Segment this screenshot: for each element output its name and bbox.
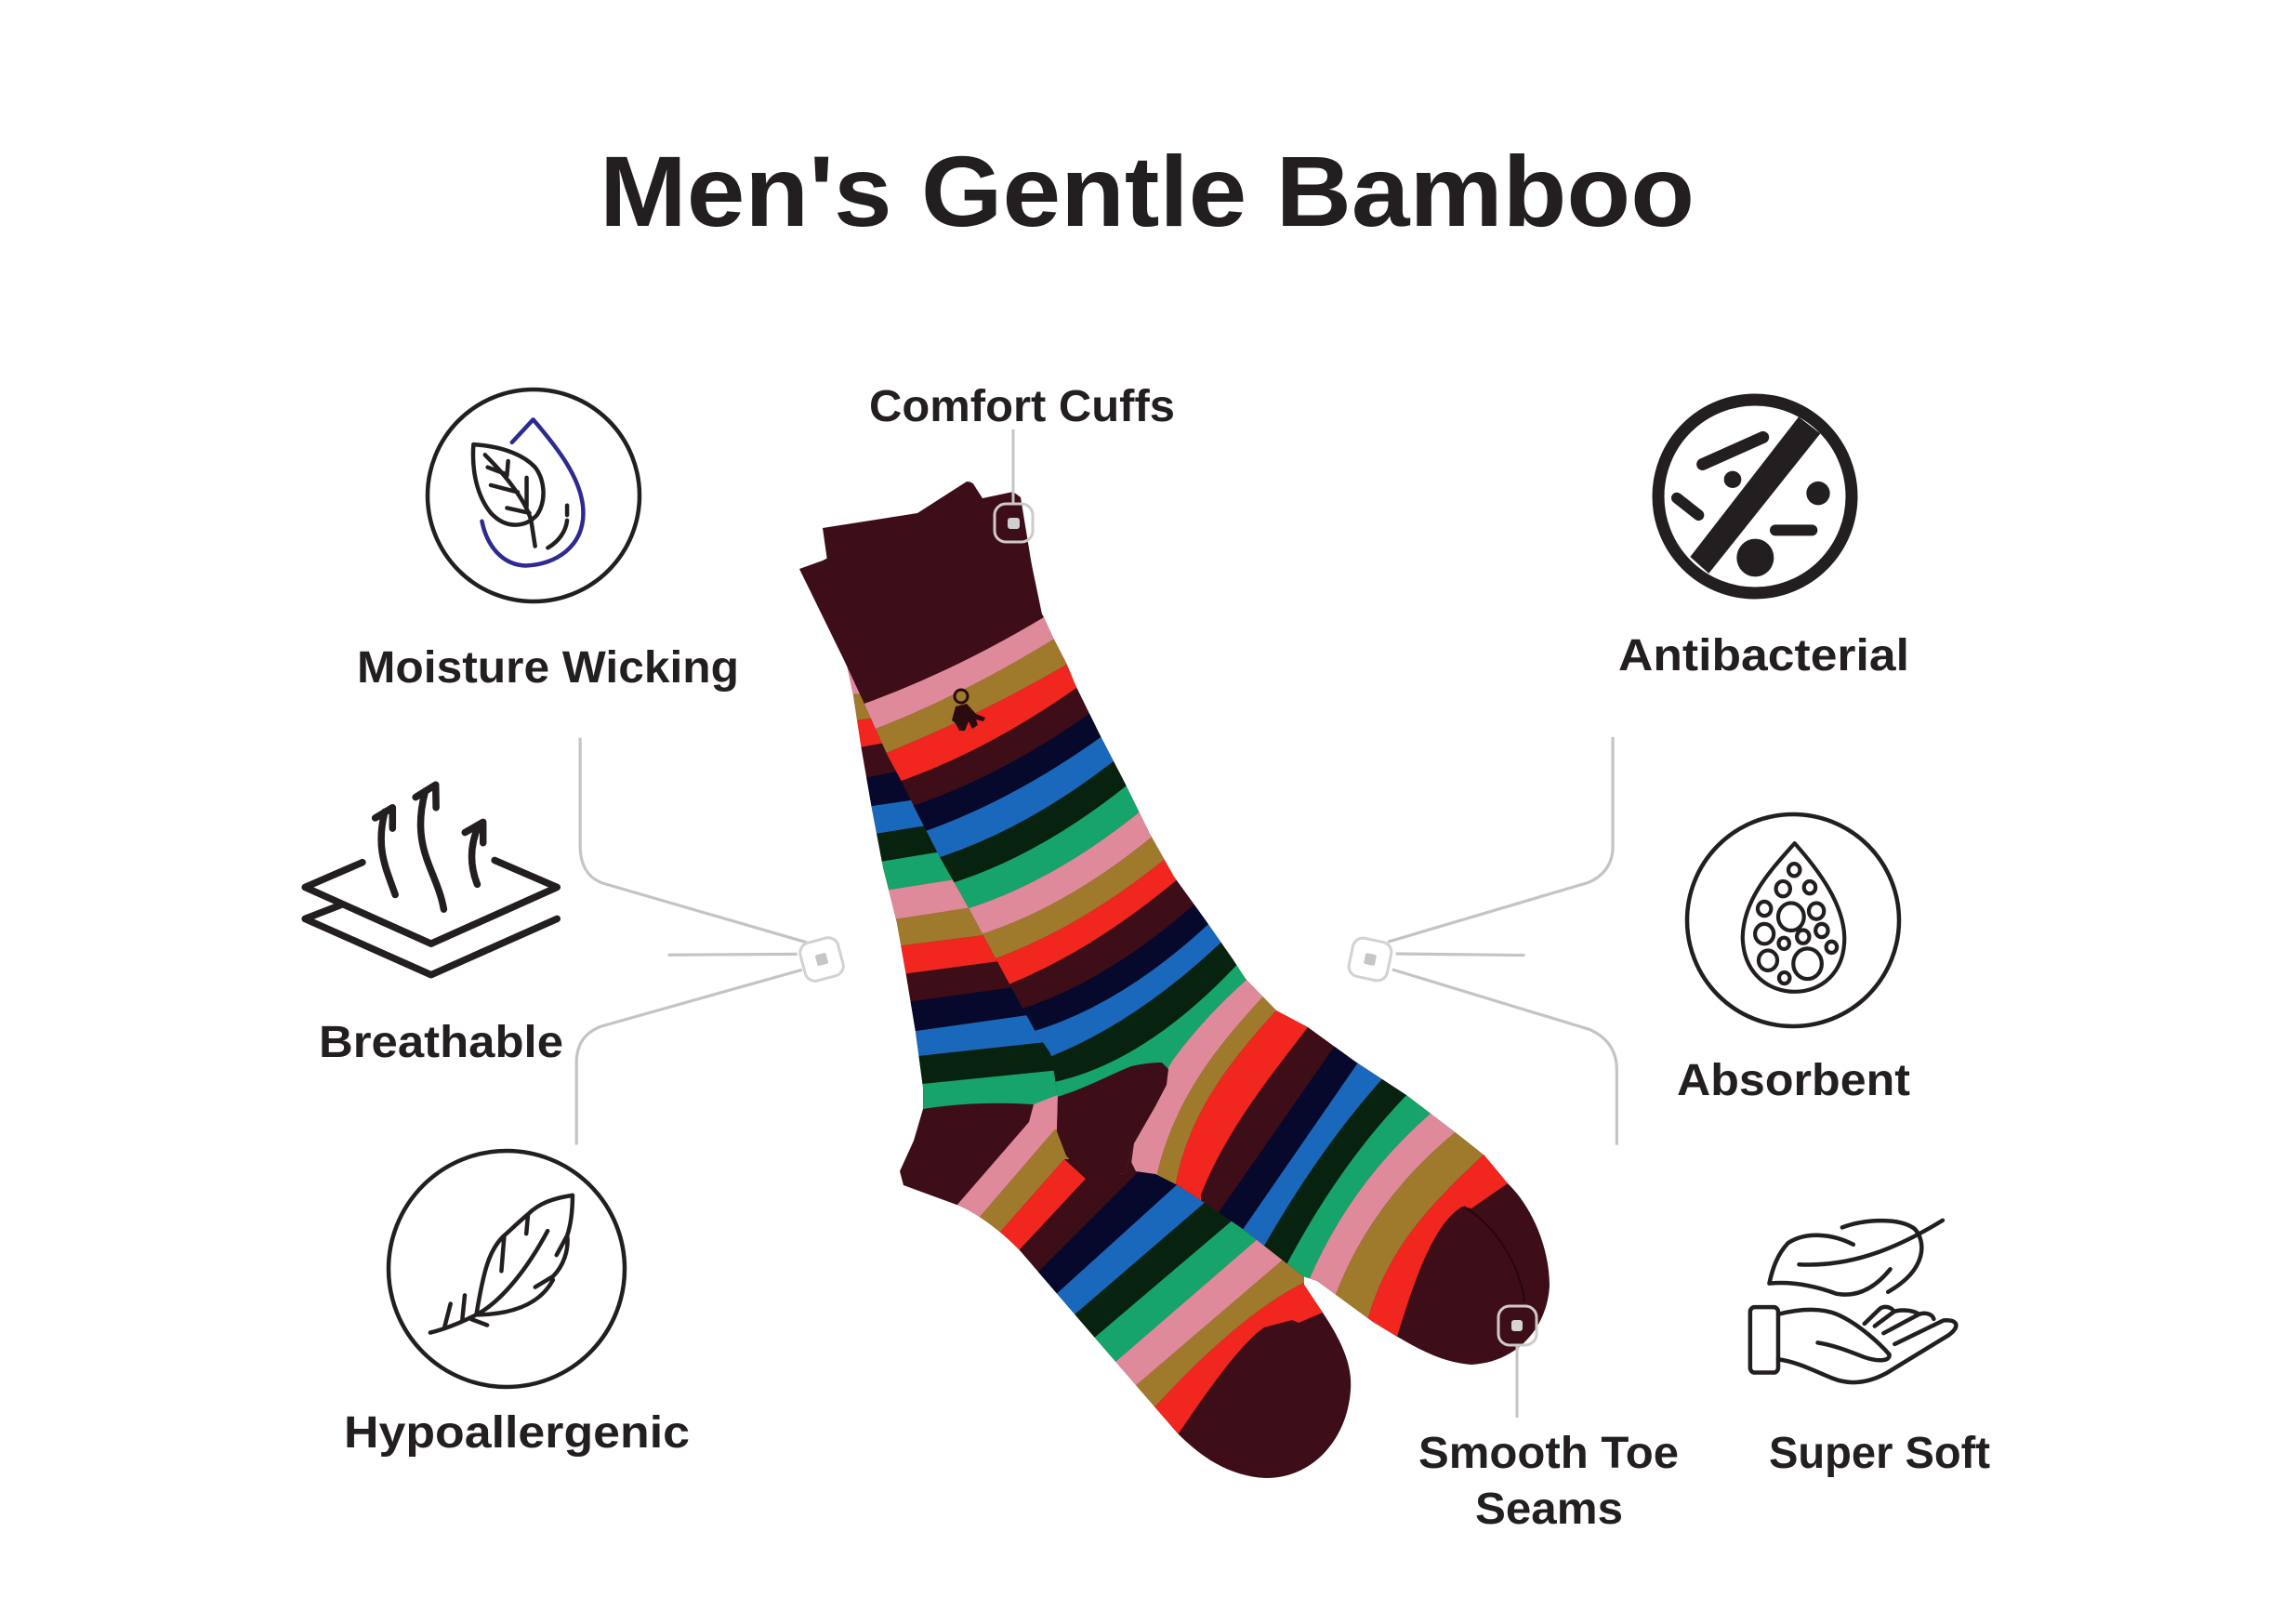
label: Comfort Cuffs: Comfort Cuffs [869,382,1175,431]
connector to Antibacterial [1388,737,1613,942]
label: Smooth Toe Seams [1418,1429,1679,1534]
sock illustration [790,465,1562,1506]
marker: Smooth Toe Seams [1498,1306,1537,1418]
icon: moisture wicking [428,389,640,601]
label: Smooth Toe Seams: Smooth Toe [1418,1429,1679,1478]
label: Super Soft: Super Soft [1769,1429,1990,1478]
connector to Hypoallergenic [576,970,802,1145]
label: Hypoallergenic: Hypoallergenic [344,1408,690,1458]
front sock [790,465,1562,1376]
label: Breathable: Breathable [319,1018,563,1067]
back sock foot stripes [957,1095,1058,1218]
label: Absorbent: Absorbent [1677,1056,1910,1105]
title: Men's Gentle Bamboo [600,135,1695,247]
label: Moisture Wicking: Moisture Wicking [357,643,739,693]
icon: absorbent drop [1687,814,1899,1026]
front sock foot stripes [1120,976,1263,1185]
icon: super soft hand and feather [1750,1221,1956,1382]
connector lines: left group [576,738,807,1145]
icon: hypoallergenic feather [389,1151,625,1387]
connector lines: right group [1388,737,1616,1145]
label: Smooth Toe Seams: Seams [1475,1485,1623,1534]
embroidered logo [952,690,985,731]
icon: breathable layers [305,785,557,975]
back sock [823,513,1352,1478]
marker: Comfort Cuffs [995,429,1033,542]
connector to Breathable [668,953,798,957]
icon: antibacterial [1658,400,1852,593]
connector to Moisture Wicking [580,738,807,943]
connector to Super Soft [1392,970,1616,1145]
marker: left hub [798,935,846,984]
connector to Absorbent [1396,954,1524,956]
marker: right hub [1347,936,1393,983]
label: Antibacterial: Antibacterial [1618,631,1909,680]
